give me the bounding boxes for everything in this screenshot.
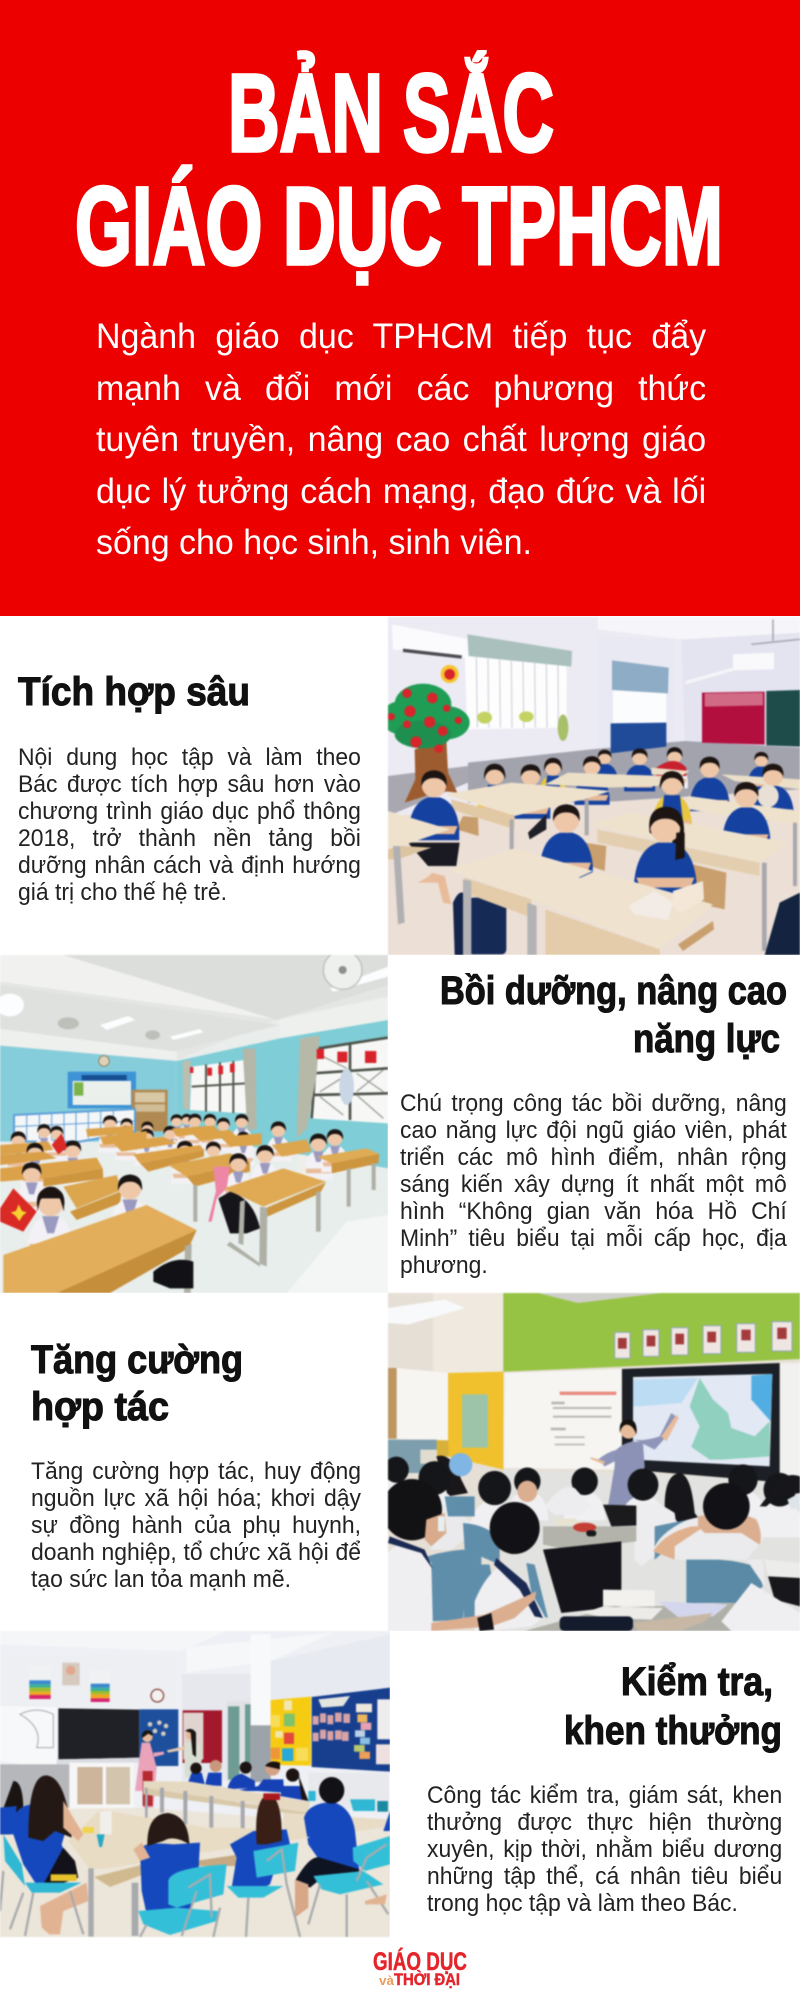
red notice board and chalkboard xyxy=(702,690,800,747)
shelf xyxy=(132,1090,168,1131)
body text: Kiểm tra: Công tác kiểm tra, giám sát, khen xyxy=(427,1782,782,1809)
left chair xyxy=(0,1834,83,1936)
side window xyxy=(611,660,669,753)
cabinet and yellow wall xyxy=(388,1368,503,1473)
back students xyxy=(6,1114,291,1172)
front desks xyxy=(449,848,713,955)
photo: classroom with tree mural xyxy=(387,616,800,955)
intro paragraph: sống cho học sinh, sinh viên. xyxy=(96,523,532,562)
back row students xyxy=(538,747,775,805)
middle desks xyxy=(445,783,800,849)
logo: Giáo dục và Thời đại xyxy=(373,1947,467,1989)
window with blind xyxy=(465,634,572,741)
foreground students xyxy=(382,1479,765,1631)
right window with flags xyxy=(297,1036,388,1138)
light fixtures xyxy=(0,967,388,1040)
green wall and posters xyxy=(503,1293,800,1372)
panel: Tích hợp sâu text xyxy=(0,616,388,955)
heading: Bồi dưỡng, nâng cao năng lực: năng lực xyxy=(633,1017,780,1061)
body text: Kiểm tra xyxy=(427,1782,782,1917)
center students xyxy=(133,1793,290,1918)
body text: Tăng cường: doanh nghiệp, tổ chức xã hội để xyxy=(31,1539,361,1566)
cabinet xyxy=(69,1763,388,1809)
heading: Tích hợp sâu: Tích hợp sâu xyxy=(18,670,250,714)
middle students xyxy=(409,1461,678,1566)
panel: red header xyxy=(0,0,800,616)
body text: Bồi dưỡng: cao năng lực đội ngũ giáo viên, phát xyxy=(400,1117,787,1144)
right foot xyxy=(365,1894,387,1904)
center desk and left desk xyxy=(63,1175,122,1220)
intro paragraph: dục lý tưởng cách mạng, đạo đức và lối xyxy=(96,472,706,511)
pencil case and books xyxy=(629,881,704,920)
left desk xyxy=(388,811,451,924)
back row students xyxy=(376,1453,800,1537)
left wall xyxy=(0,1046,177,1142)
teacher xyxy=(591,1413,679,1506)
front chair xyxy=(678,921,714,951)
wall clock xyxy=(151,1689,164,1702)
body text: Kiểm tra: xuyên, kịp thời, nhằm biểu dương xyxy=(427,1836,782,1863)
ceiling fan xyxy=(58,951,362,1040)
right seated student xyxy=(295,1777,390,1918)
body text: Bồi dưỡng: Minh” tiêu biểu tại mỗi cấp học, địa xyxy=(400,1225,787,1252)
heading: Tăng cường hợp tác xyxy=(30,1338,243,1429)
lower wall xyxy=(503,1470,800,1631)
body text: Tích hợp sâu xyxy=(18,744,361,906)
body text: Tích hợp sâu: 2018, trở thành nền tảng bồi xyxy=(18,825,361,852)
pillar xyxy=(251,1634,271,1782)
body text: Tăng cường: sự đồng hành của phụ huynh, xyxy=(31,1512,361,1539)
title xyxy=(75,50,723,288)
heading: Tăng cường hợp tác: Tăng cường xyxy=(31,1338,243,1382)
back desks xyxy=(545,768,800,789)
far students xyxy=(187,1760,308,1801)
body text: Tích hợp sâu: dưỡng nhân cách và định hướng xyxy=(18,852,361,879)
heading: Tăng cường hợp tác: hợp tác xyxy=(31,1385,169,1429)
air conditioner xyxy=(392,624,470,659)
blue board xyxy=(312,1688,390,1772)
near table xyxy=(68,1809,310,1937)
right long desk xyxy=(590,813,797,951)
posters xyxy=(28,1663,110,1702)
logo: Giáo dục và Thời đại: THỜI ĐẠI xyxy=(394,1970,460,1989)
back desks xyxy=(0,1126,262,1155)
papers on desk xyxy=(525,1583,800,1631)
notice boards xyxy=(139,1701,251,1781)
front boy xyxy=(540,804,593,878)
cyan chairs xyxy=(138,1836,390,1935)
heading: Kiểm tra, khen thưởng: Kiểm tra, xyxy=(621,1660,773,1704)
middle window with curtains xyxy=(183,1048,257,1132)
body text: Bồi dưỡng xyxy=(400,1090,787,1279)
middle students xyxy=(477,757,794,821)
floor xyxy=(0,1135,388,1293)
body text: Kiểm tra: những tập thể, cá nhân tiêu biểu xyxy=(427,1863,782,1890)
panel: Bồi dưỡng, nâng cao năng lực text xyxy=(388,955,800,1293)
middle desks xyxy=(0,1139,379,1222)
photo: blue-wall classroom xyxy=(0,954,388,1293)
body text: Tích hợp sâu: Bác được tích hợp sâu hơn vào xyxy=(18,771,361,798)
body text: Bồi dưỡng: phương. xyxy=(400,1252,488,1279)
lockers xyxy=(14,1109,135,1142)
right bag xyxy=(765,893,800,955)
panel: Kiểm tra, khen thưởng text xyxy=(390,1631,800,1937)
desk with laptop xyxy=(543,1505,800,1613)
title: BẢN SẮC xyxy=(228,52,554,175)
whiteboard xyxy=(504,1369,621,1470)
long back table xyxy=(143,1781,388,1839)
front girl xyxy=(634,807,696,895)
body text: Kiểm tra: trong học tập và làm theo Bác. xyxy=(427,1890,738,1917)
heading: Bồi dưỡng, nâng cao năng lực xyxy=(440,969,787,1061)
floor xyxy=(0,1808,390,1937)
body text: Bồi dưỡng: triển các mô hình điểm, nhân rộng xyxy=(400,1144,787,1171)
body text: Bồi dưỡng: sáng kiến xây dựng ít nhất một mô xyxy=(400,1171,787,1198)
bulletin board xyxy=(68,1072,136,1108)
ceiling lights xyxy=(388,1293,661,1325)
front students xyxy=(408,770,770,866)
logo: Giáo dục và Thời đại: và xyxy=(379,1973,395,1988)
intro paragraph xyxy=(96,317,706,562)
body text: Bồi dưỡng: Chú trọng công tác bồi dưỡng, nâng xyxy=(400,1090,787,1117)
body text: Tăng cường xyxy=(31,1458,361,1593)
lower wall xyxy=(0,1764,70,1808)
body text: Tích hợp sâu: chương trình giáo dục phổ thông xyxy=(18,798,361,825)
middle students xyxy=(21,1129,349,1191)
front students and flag xyxy=(0,1175,151,1261)
intro paragraph: Ngành giáo dục TPHCM tiếp tục đẩy xyxy=(96,317,706,356)
front left desk xyxy=(3,1205,197,1293)
panel: Tăng cường hợp tác text xyxy=(0,1293,388,1631)
intro paragraph: mạnh và đổi mới các phương thức xyxy=(96,369,706,408)
right wall xyxy=(177,1020,388,1168)
body text: Tích hợp sâu: Nội dung học tập và làm theo xyxy=(18,744,361,771)
map screen xyxy=(622,1363,780,1482)
body text: Tăng cường: tạo sức lan tỏa mạnh mẽ. xyxy=(31,1566,291,1593)
yellow board xyxy=(271,1697,311,1766)
intro paragraph: tuyên truyền, nâng cao chất lượng giáo xyxy=(96,420,706,459)
photo: teacher at map screen xyxy=(387,1292,800,1631)
body text: Kiểm tra: thưởng được thực hiện thường xyxy=(427,1809,782,1836)
left students xyxy=(0,1775,88,1934)
body text: Bồi dưỡng: hình “Không gian văn hóa Hồ Chí xyxy=(400,1198,787,1225)
left students xyxy=(15,1153,306,1233)
mid flag xyxy=(52,1133,67,1154)
body text: Tích hợp sâu: giá trị cho thế hệ trẻ. xyxy=(18,879,227,906)
photo: students around tables xyxy=(0,1631,390,1938)
right foreground desk xyxy=(224,1168,326,1267)
chair frames xyxy=(140,1844,388,1937)
chairs xyxy=(427,1496,763,1621)
whiteboard and TV xyxy=(0,1706,139,1769)
tree mural xyxy=(381,665,470,803)
heading: Kiểm tra, khen thưởng xyxy=(564,1660,782,1753)
backpack xyxy=(453,892,506,955)
chairs back xyxy=(308,1791,388,1812)
body text: Tăng cường: nguồn lực xã hội hóa; khơi dậy xyxy=(31,1485,361,1512)
teachers xyxy=(135,1729,202,1808)
wall AC right xyxy=(685,619,800,684)
chair xyxy=(585,843,606,871)
body text: Tăng cường: Tăng cường hợp tác, huy động xyxy=(31,1458,361,1485)
